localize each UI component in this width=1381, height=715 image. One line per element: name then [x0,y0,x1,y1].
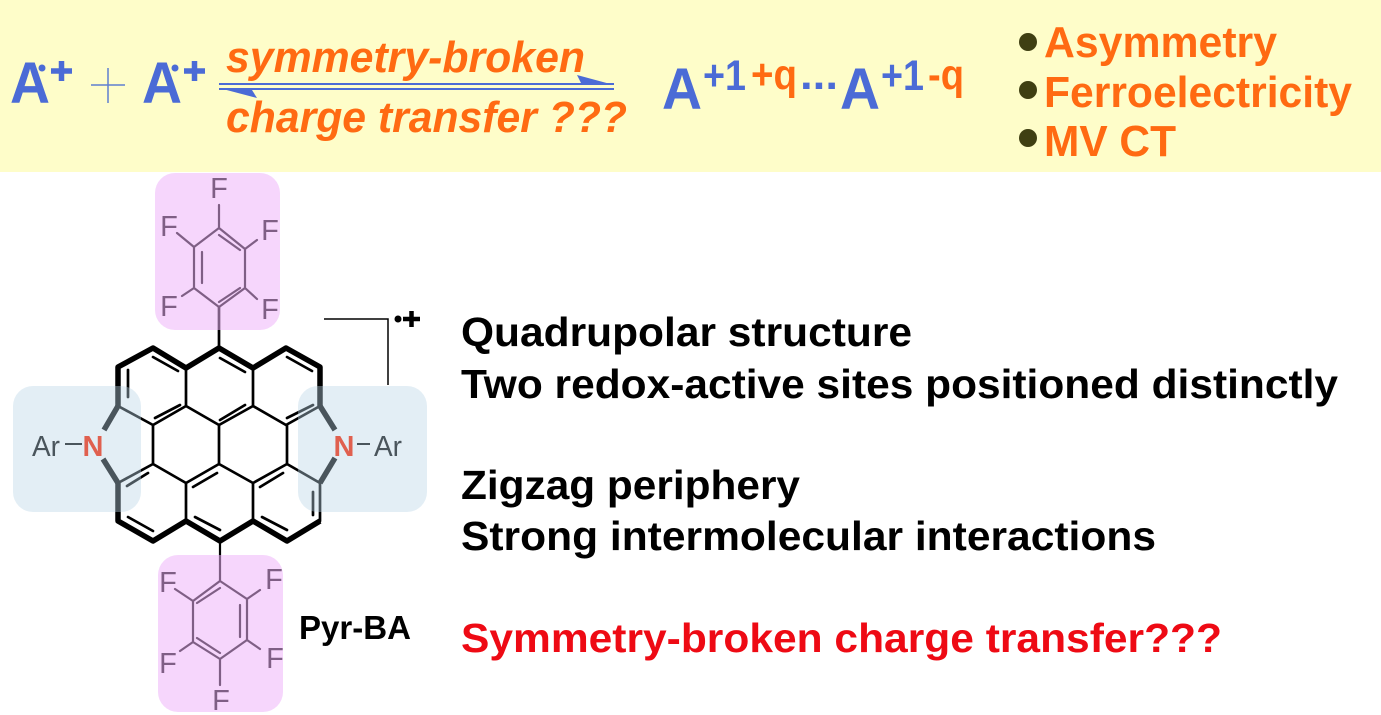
molecule: Pyr-BA structure [32,173,402,715]
text: quadrupolar structure: Quadrupolar structure [461,309,912,355]
equation: mixed-valence product: +q [751,51,797,99]
bullet list [1019,18,1353,166]
equation: mixed-valence product: -q [928,51,964,99]
arrow label: symmetry-broken: symmetry-broken [226,33,585,82]
core thin bonds [118,307,320,521]
bottom pentafluorophenyl: F [265,564,283,596]
top banner background [0,0,1381,172]
equation: mixed-valence product: A [662,57,702,122]
radical cation bracket [324,311,420,385]
equation: mixed-valence product [662,51,964,122]
bullet list: MV CT [1044,117,1176,166]
bullet list: Ferroelectricity [1044,68,1353,117]
text: redox-active sites: Two redox-active sites positioned distinctly [461,361,1338,407]
periphery thick bonds [118,348,320,541]
highlight: left nitrogen blue box [13,386,141,512]
top pentafluorophenyl: F [261,215,279,247]
text: red question: Symmetry-broken charge transfer??? [461,615,1222,661]
equation: two radical cations: A [10,51,50,116]
bullet list: Asymmetry [1044,18,1278,67]
Ar labels: Ar [32,431,60,463]
inner double bonds [127,357,313,531]
equation: mixed-valence product: +1 [881,52,924,100]
top pentafluorophenyl: F [261,294,279,326]
Ar labels [32,431,402,463]
Ar labels: Ar [374,431,402,463]
highlight: bottom aryl pink box [158,555,283,712]
bottom pentafluorophenyl: F [159,648,177,680]
top pentafluorophenyl: F [210,173,228,205]
equation: mixed-valence product: ... [800,51,838,99]
equation: mixed-valence product: +1 [703,52,746,100]
arrow label: charge transfer: charge transfer ??? [226,93,627,142]
equation: two radical cations: A [142,51,182,116]
compound label: Pyr-BA [299,609,411,646]
pyrrole N bonds [103,406,335,483]
equation: mixed-valence product: A [840,57,880,122]
highlight: right nitrogen blue box [298,386,427,512]
text: zigzag periphery: Zigzag periphery [461,462,800,508]
equilibrium arrows [219,75,614,98]
text: intermolecular interactions: Strong intermolecular interactions [461,513,1156,559]
equation: two radical cations [10,51,205,116]
nitrogen atom right: N [334,431,354,463]
top pentafluorophenyl: F [160,211,178,243]
top pentafluorophenyl [160,173,279,326]
top pentafluorophenyl: F [160,291,178,323]
bottom pentafluorophenyl [159,541,284,715]
highlight: top aryl pink box [155,173,280,330]
nitrogen atom left: N [83,431,103,463]
bottom pentafluorophenyl: F [159,567,177,599]
bottom pentafluorophenyl: F [266,643,284,675]
